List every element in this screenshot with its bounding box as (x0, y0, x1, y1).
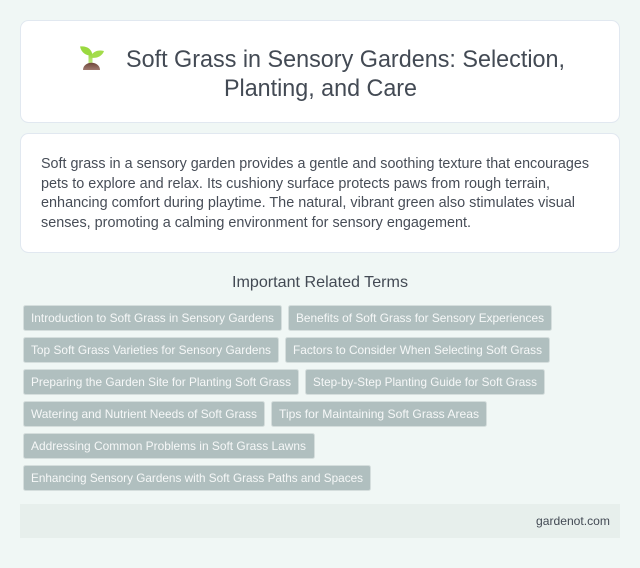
tag: Enhancing Sensory Gardens with Soft Grass Paths and Spaces (31, 471, 363, 485)
tag: Preparing the Garden Site for Planting Soft Grass (31, 375, 291, 389)
panel: title card (20, 20, 620, 122)
tag: Watering and Nutrient Needs of Soft Grass (31, 407, 257, 421)
footer: site name: gardenot.com (536, 514, 610, 528)
footer (20, 504, 620, 538)
tag (286, 338, 550, 362)
icon: seedling (80, 46, 104, 70)
text: description paragraph (41, 156, 589, 231)
tag (24, 306, 282, 330)
heading: related terms: Important Related Terms (232, 274, 408, 291)
tag (288, 306, 552, 330)
tag (24, 338, 278, 362)
title: Planting, and Care (224, 75, 417, 102)
tag (24, 434, 314, 458)
title (126, 46, 565, 102)
tag: Step-by-Step Planting Guide for Soft Grass (313, 375, 537, 389)
title: Soft Grass in Sensory Gardens: Selection, (126, 46, 565, 73)
tag list (24, 306, 552, 490)
tag (24, 466, 370, 490)
text: description paragraph: pets to explore and relax. Its cushiony surface protects paws from rough terrain, (41, 176, 550, 192)
tag: Top Soft Grass Varieties for Sensory Gardens (31, 343, 271, 357)
tag: Addressing Common Problems in Soft Grass Lawns (31, 439, 306, 453)
text: description paragraph: enhancing comfort during playtime. The natural, vibrant green also stimulates visual (41, 195, 575, 211)
text: description paragraph: senses, promoting a calming environment for sensory engagement. (41, 215, 471, 231)
text: description paragraph: Soft grass in a sensory garden provides a gentle and soothing texture that encourages (41, 156, 589, 172)
tag: Tips for Maintaining Soft Grass Areas (279, 407, 479, 421)
tag: Benefits of Soft Grass for Sensory Experiences (296, 311, 544, 325)
tag (272, 402, 486, 426)
tag (24, 370, 298, 394)
tag: Introduction to Soft Grass in Sensory Gardens (31, 311, 274, 325)
tag (306, 370, 544, 394)
tag (24, 402, 264, 426)
panel: description (20, 134, 620, 252)
tag: Factors to Consider When Selecting Soft Grass (293, 343, 542, 357)
